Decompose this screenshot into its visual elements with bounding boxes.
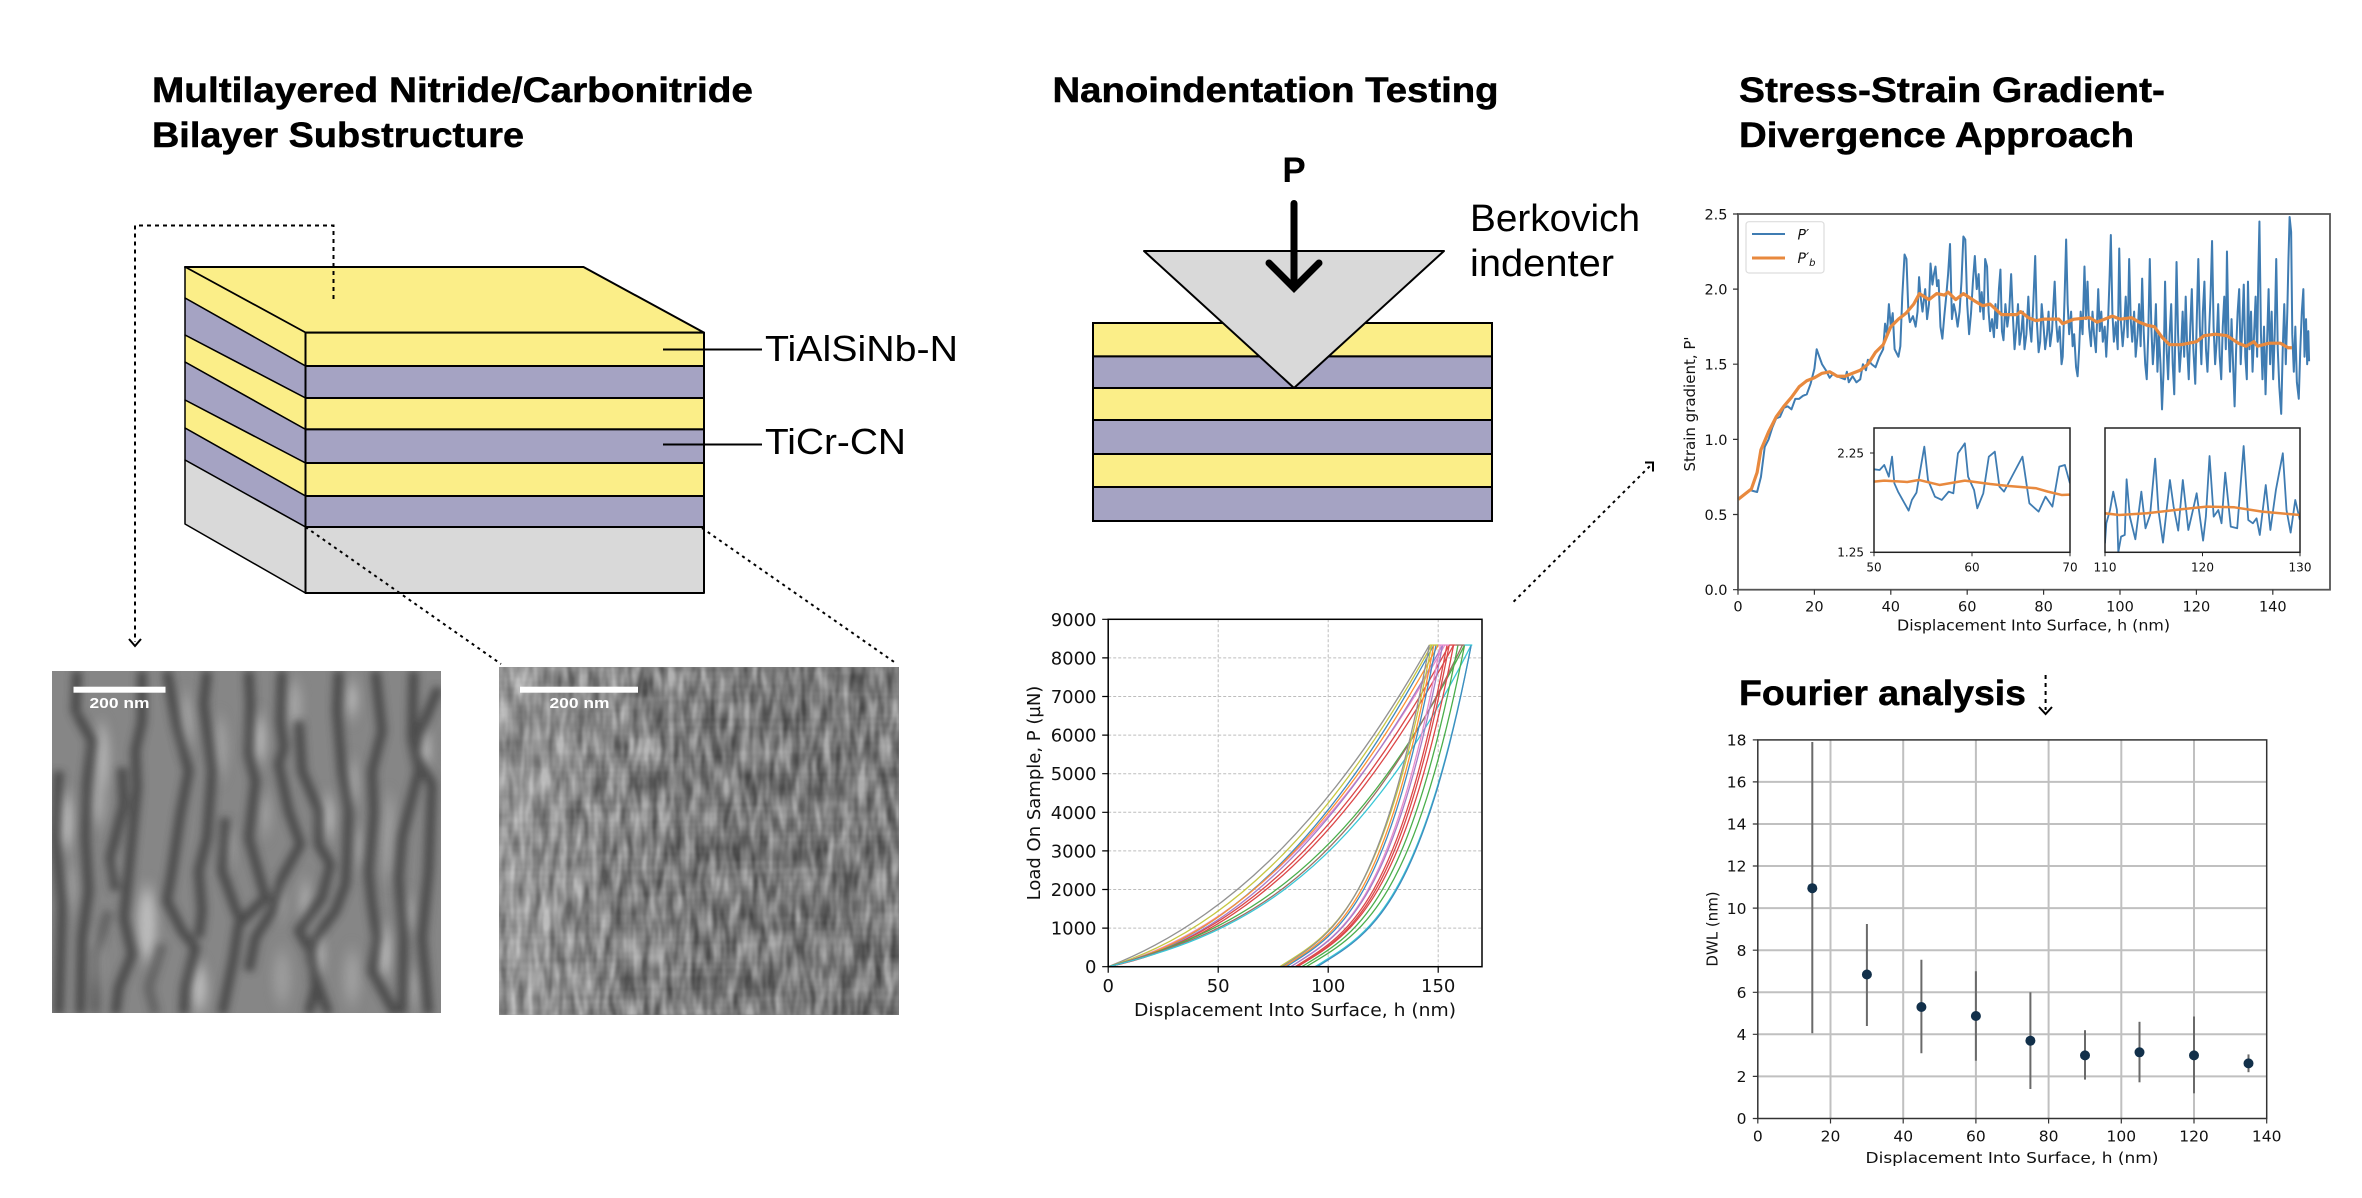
legend: P′: [1798, 228, 1810, 244]
x tick labels: 140: [2259, 600, 2287, 616]
inset: 50-70 nm: 1.25: [1837, 546, 1864, 560]
heading: Fourier analysis: Fourier analysis: [1739, 674, 2026, 713]
gridlines: [1108, 619, 1482, 967]
smoothed trace: [1738, 292, 2292, 500]
y tick labels: [1051, 610, 1096, 978]
image: plan-view SEM micrograph: [52, 671, 441, 1014]
y tick labels: 1.0: [1704, 433, 1728, 449]
side faces: [185, 267, 306, 593]
x tick labels: [1102, 976, 1455, 997]
top face: [185, 267, 704, 333]
x tick labels: 140: [2252, 1127, 2281, 1145]
heading: stress-strain gradient-divergence approach: [1739, 71, 2165, 155]
y tick labels: 10: [1727, 900, 1746, 918]
y axis label: Strain gradient, P': [1681, 336, 1699, 472]
main strain-gradient trace: [1751, 217, 2309, 492]
x tick labels: 150: [1421, 976, 1455, 997]
x axis label: Displacement Into Surface, h (nm): [1897, 616, 2170, 634]
arrow: dotted path from top surface to plan-view micrograph: [129, 226, 334, 646]
label: Berkovich indenter: indenter: [1470, 243, 1614, 285]
y tick labels: 6000: [1051, 726, 1096, 747]
tick marks: [1102, 619, 1438, 973]
scale bar: plan-view 200 nm: [74, 687, 166, 712]
inset: 110-130 nm: 130: [2289, 561, 2311, 575]
y tick labels: 18: [1727, 732, 1746, 750]
inset: 50-70 nm: [1837, 428, 2078, 575]
load curves: [1108, 645, 1472, 967]
y axis label: Load On Sample, P (µN): [1024, 686, 1045, 900]
x tick labels: 20: [1805, 600, 1824, 616]
inset: 50-70 nm: 70: [2062, 561, 2078, 575]
y tick labels: 5000: [1051, 764, 1096, 785]
callout: TiCr-CN label: TiCr-CN: [765, 421, 906, 462]
scale bar: cross-section 200 nm: 200 nm: [550, 695, 610, 712]
x tick labels: [1753, 1127, 2281, 1145]
y tick labels: 2.5: [1704, 208, 1728, 224]
x tick labels: 40: [1893, 1127, 1913, 1145]
heading: stress-strain gradient-divergence approach: Divergence Approach: [1739, 116, 2134, 155]
x tick labels: 0: [1753, 1127, 1763, 1145]
chart: load-displacement curves: [1024, 610, 1482, 1021]
y tick labels: 0: [1737, 1110, 1746, 1128]
x tick labels: 0: [1733, 600, 1743, 616]
diagram: 3D multilayer block: [185, 267, 704, 593]
image: cross-section SEM micrograph: [499, 667, 899, 1015]
inset: 50-70 nm: 60: [1964, 561, 1980, 575]
x tick labels: 100: [2106, 600, 2134, 616]
axes frame: [1758, 740, 2267, 1118]
x tick labels: 60: [1958, 600, 1976, 616]
y tick labels: 2.0: [1704, 283, 1728, 299]
y tick labels: 4000: [1051, 803, 1096, 824]
inset: 110-130 nm: 120: [2191, 561, 2214, 575]
x tick labels: 120: [2179, 1127, 2209, 1145]
inset: 50-70 nm: 50: [1866, 561, 1882, 575]
arrow: dotted zoom line to cross-section micrograph, left: [306, 527, 501, 664]
y tick labels: 0.0: [1704, 583, 1728, 599]
label: Berkovich indenter: Berkovich: [1470, 198, 1640, 240]
y axis label: DWL (nm): [1704, 891, 1722, 967]
y tick labels: 16: [1727, 774, 1746, 792]
arrow: applied load P: [1269, 151, 1319, 288]
y tick labels: 7000: [1051, 687, 1096, 708]
x tick labels: 100: [1311, 976, 1345, 997]
gridlines: [1758, 740, 2267, 1118]
diagram: indented layer stack: [1093, 323, 1492, 521]
tick marks: [1733, 214, 2273, 595]
y tick labels: 12: [1727, 858, 1746, 876]
diagram: Berkovich indenter triangle: [1144, 251, 1444, 388]
x tick labels: 60: [1966, 1127, 1986, 1145]
y tick labels: 1000: [1051, 919, 1096, 940]
legend: [1746, 222, 1824, 273]
axes frame: [1738, 214, 2330, 590]
inset: 110-130 nm: 110: [2094, 561, 2116, 575]
tick marks: [1753, 740, 2267, 1124]
x axis label: Displacement Into Surface, h (nm): [1866, 1149, 2158, 1167]
label: Berkovich indenter: [1470, 198, 1640, 285]
heading: multilayered bilayer substructure: [152, 71, 753, 155]
y tick labels: 8000: [1051, 648, 1096, 669]
arrow: applied load P: P: [1282, 151, 1306, 190]
x axis label: Displacement Into Surface, h (nm): [1134, 1000, 1456, 1021]
heading: multilayered bilayer substructure: Multilayered Nitride/Carbonitride: [152, 71, 753, 110]
y tick labels: 2: [1737, 1068, 1746, 1086]
x tick labels: 100: [2107, 1127, 2136, 1145]
x tick labels: 20: [1821, 1127, 1840, 1145]
arrow: dotted arrow to DWL plot: [2039, 675, 2052, 714]
error bars: [1812, 742, 2248, 1093]
y tick labels: 14: [1727, 816, 1746, 834]
x tick labels: 80: [2039, 1127, 2058, 1145]
y tick labels: 4: [1737, 1026, 1746, 1044]
x tick labels: 0: [1102, 976, 1114, 997]
heading: multilayered bilayer substructure: Bilayer Substructure: [152, 116, 524, 155]
y tick labels: 6: [1737, 984, 1746, 1002]
y tick labels: 0.5: [1704, 508, 1728, 524]
inset: 110-130 nm: [2094, 428, 2311, 575]
x tick labels: 120: [2183, 600, 2210, 616]
y tick labels: 2000: [1051, 880, 1096, 901]
x tick labels: 50: [1207, 976, 1230, 997]
y tick labels: [1727, 732, 1746, 1128]
chart: strain gradient versus displacement: [1681, 208, 2330, 634]
y tick labels: 9000: [1051, 610, 1096, 631]
y tick labels: 1.5: [1704, 358, 1728, 374]
x tick labels: [1733, 600, 2287, 616]
inset: 50-70 nm: 2.25: [1837, 446, 1864, 460]
legend: b: [1809, 258, 1815, 269]
arrow: dotted link from load curves to strain-gradient plot: [1514, 462, 1653, 602]
front faces: [306, 333, 704, 593]
y tick labels: [1704, 208, 1728, 599]
y tick labels: 0: [1085, 957, 1096, 978]
arrow: dotted zoom line to cross-section micrograph, right: [702, 528, 897, 664]
legend: P′: [1798, 251, 1809, 267]
axes frame: [1108, 619, 1482, 967]
heading: stress-strain gradient-divergence approach: Stress-Strain Gradient-: [1739, 71, 2165, 110]
x tick labels: 40: [1882, 600, 1900, 616]
scale bar: cross-section 200 nm: [520, 687, 638, 712]
data points: [1807, 883, 2254, 1068]
scale bar: plan-view 200 nm: 200 nm: [90, 695, 150, 712]
heading: nanoindentation testing: Nanoindentation Testing: [1052, 71, 1498, 110]
chart: DWL versus displacement: [1704, 732, 2281, 1167]
callout: TiAlSiNb-N label: TiAlSiNb-N: [765, 328, 958, 369]
x tick labels: 80: [2034, 600, 2053, 616]
y tick labels: 3000: [1051, 841, 1096, 862]
y tick labels: 8: [1737, 942, 1746, 960]
